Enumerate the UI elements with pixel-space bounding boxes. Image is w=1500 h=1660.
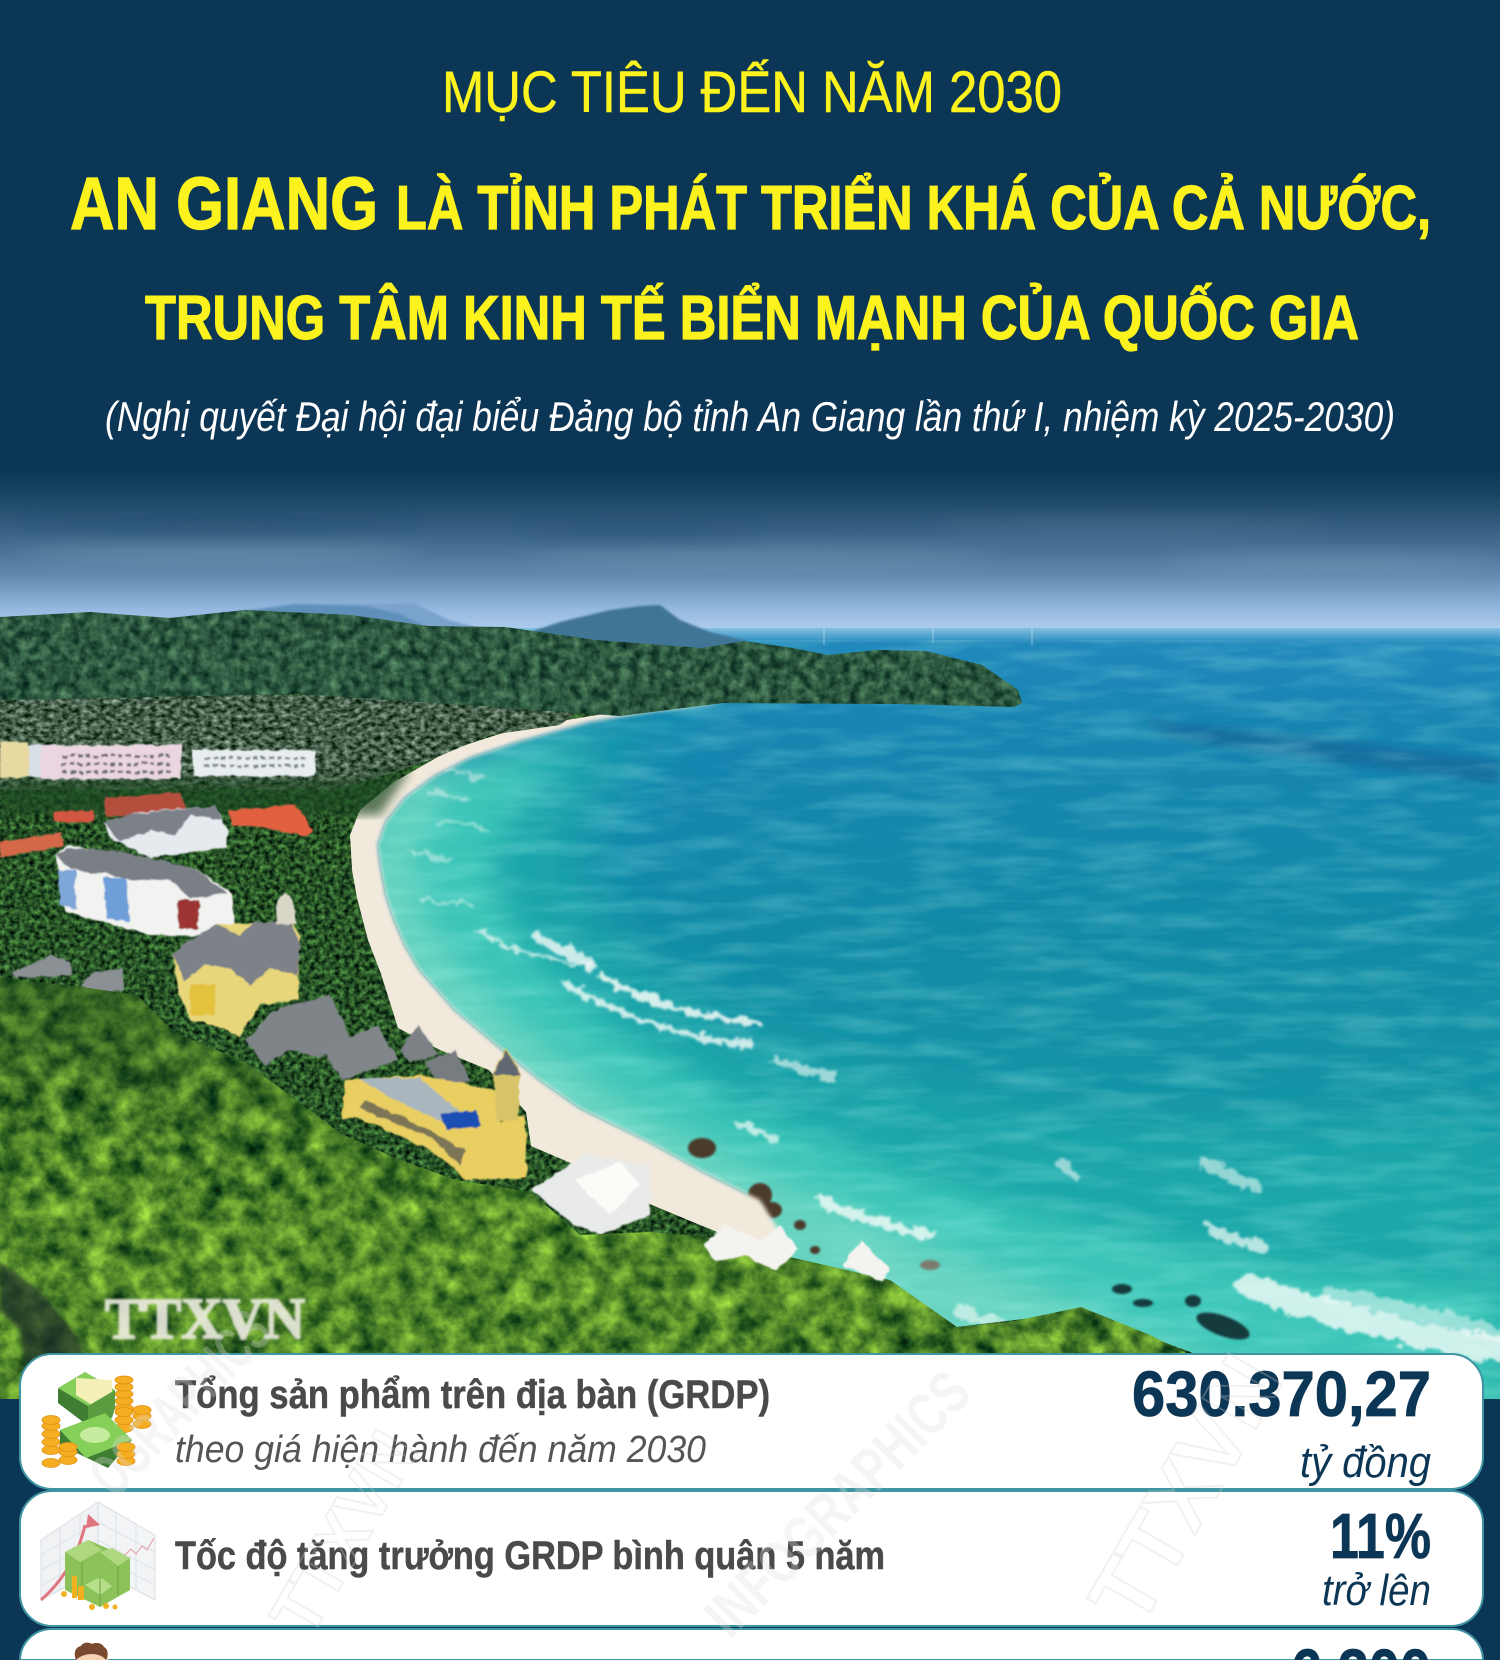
- lower forest: [0, 978, 1196, 1400]
- sky: [0, 484, 1500, 628]
- beach photo: [0, 470, 1500, 1400]
- resort villas area: [0, 695, 600, 790]
- title kicker: MỤC TIÊU ĐẾN NĂM 2030: [442, 60, 1062, 125]
- buildings: [0, 742, 650, 1235]
- card 1 unit: tỷ đồng: [1300, 1438, 1431, 1487]
- card 1 label: Tổng sản phẩm trên địa bàn (GRDP): [175, 1373, 770, 1417]
- waves: [410, 770, 1500, 1350]
- icon: money and coins: [42, 1372, 151, 1468]
- white tents by the shore: [703, 1225, 890, 1282]
- card 1: GRDP: [20, 1354, 1483, 1489]
- card 2: growth: [20, 1491, 1483, 1626]
- dark rocks: [688, 1138, 1253, 1345]
- TTXVN logo: TTXVN: [105, 1286, 305, 1351]
- card 2 label: Tốc độ tăng trưởng GRDP bình quân 5 năm: [175, 1534, 885, 1578]
- card 1 value: 630.370,27: [1132, 1358, 1431, 1430]
- watermark: TTXVN right: TTXVN: [1071, 1339, 1302, 1640]
- card 3: partially visible: [20, 1629, 1483, 1660]
- watermark: infographics left: OGRAPHICS: [76, 1297, 284, 1509]
- card 2 unit: trở lên: [1322, 1566, 1431, 1615]
- title line 1: An Giang: AN GIANG: [70, 162, 378, 245]
- palm band blending below villas: [0, 770, 410, 815]
- watermark: infographics centre: INFOGRAPHICS: [692, 1358, 983, 1649]
- watermark: TTXVN left: TTXVN: [255, 1418, 433, 1648]
- land base: [0, 694, 1193, 1353]
- main title: [70, 162, 1431, 353]
- distant hills: [168, 603, 751, 648]
- headland forest: [0, 610, 1022, 716]
- card 1 sublabel: theo giá hiện hành đến năm 2030: [175, 1429, 706, 1471]
- icon: growth chart: [41, 1502, 155, 1610]
- card 2 value: 11%: [1330, 1500, 1431, 1572]
- sandy beach: [350, 704, 779, 1241]
- road corner: [0, 1260, 84, 1368]
- watermarks: [76, 1297, 1302, 1649]
- sea: [376, 628, 1500, 1399]
- icon: person: [75, 1643, 108, 1660]
- lower navy background: [0, 1399, 1500, 1660]
- wind turbines on horizon: [824, 628, 1032, 645]
